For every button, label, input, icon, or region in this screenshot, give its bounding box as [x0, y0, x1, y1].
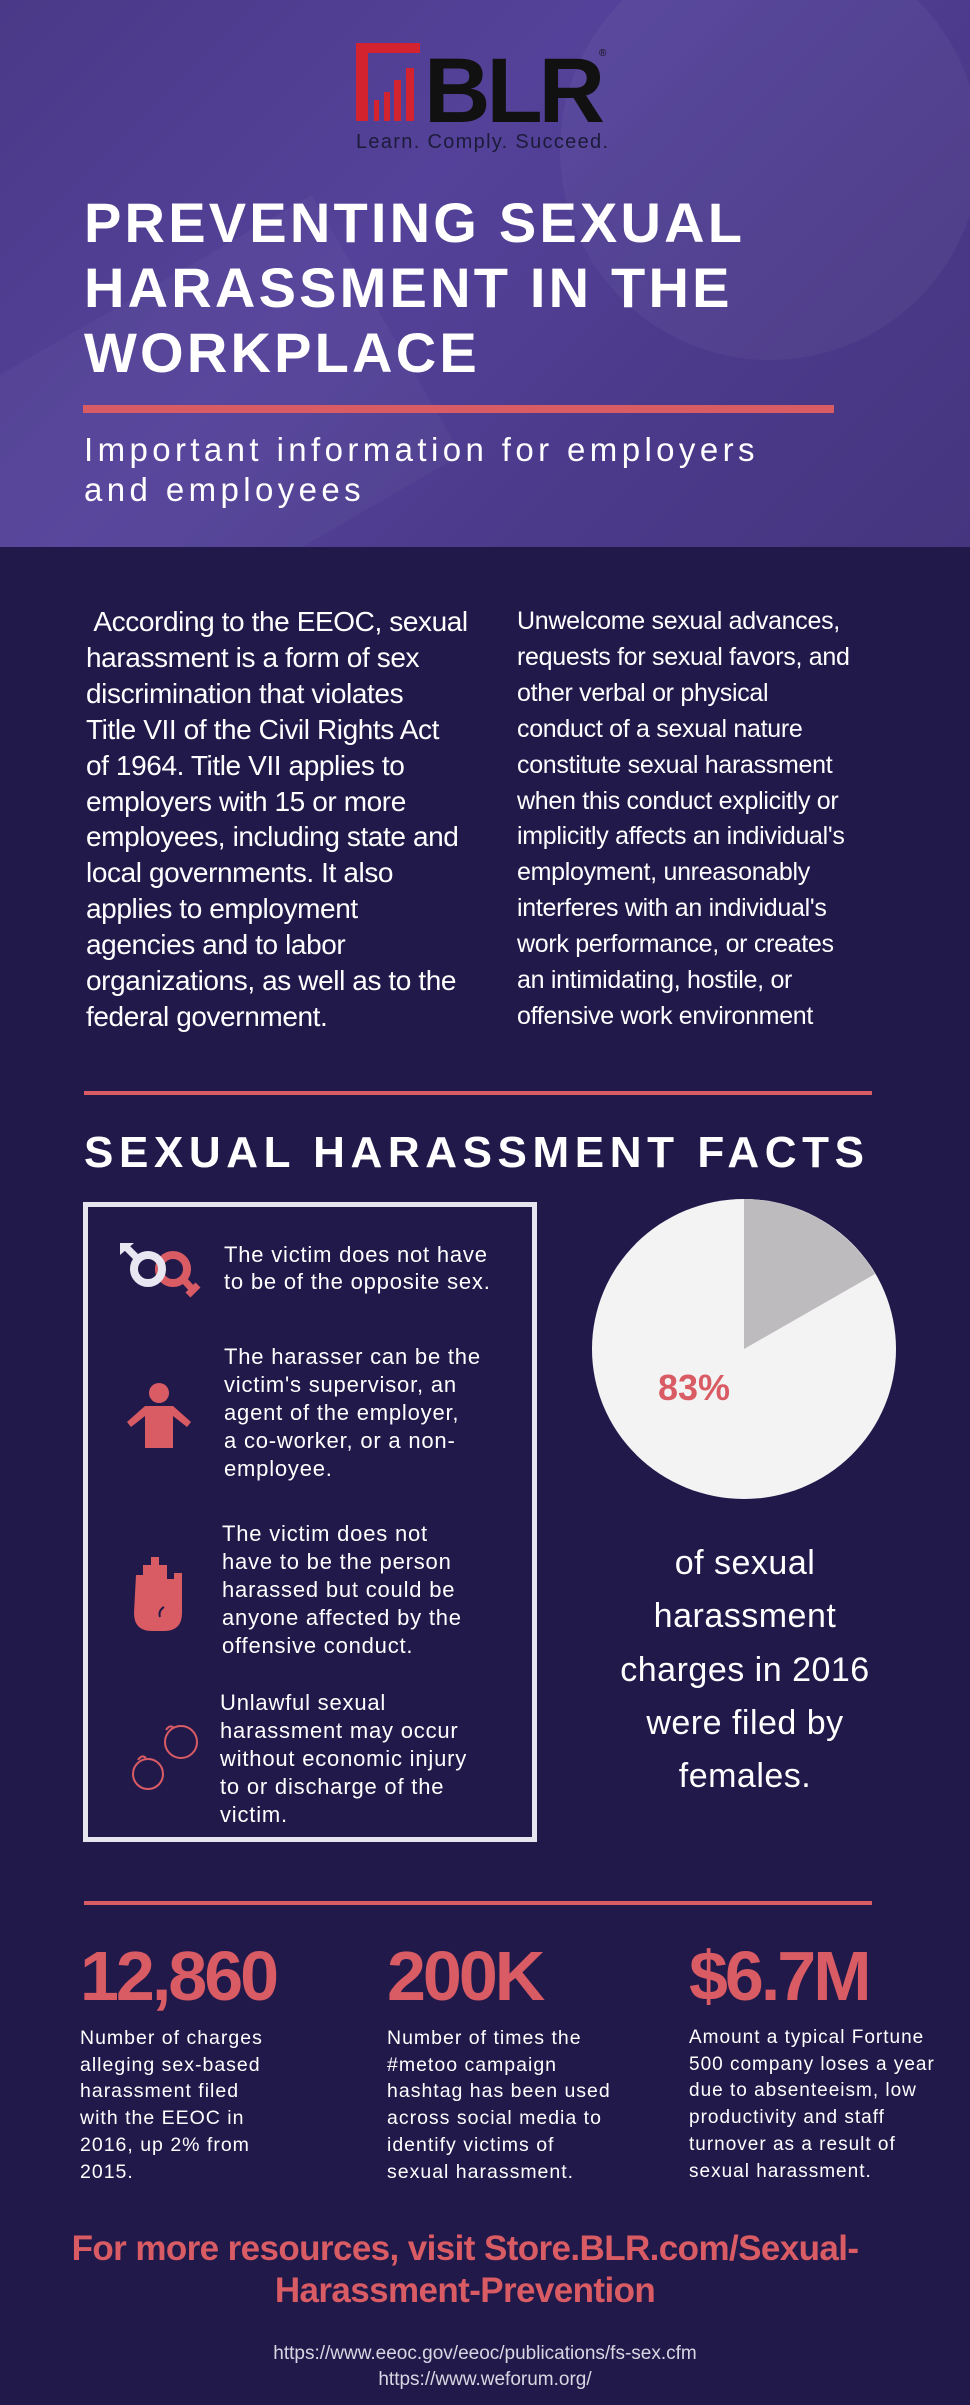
- text block: what constitutes harassment: constitute sexual harassment: [517, 751, 832, 779]
- text block: what constitutes harassment: an intimidating, hostile, or: [517, 966, 792, 994]
- text: harasser: agent of the employer,: [224, 1400, 459, 1425]
- stat: $6.7M: due to absenteeism, low: [689, 2080, 917, 2101]
- stat: 12,860: [80, 1937, 276, 2183]
- sources: https://www.eeoc.gov/eeoc/publications/fs-sex.cfm: [273, 2343, 697, 2364]
- logo: Learn. Comply. Succeed.: [356, 131, 608, 153]
- text block: EEOC definition: employees, including state and: [86, 821, 458, 852]
- call to action: Harassment-Prevention: [275, 2271, 655, 2310]
- text: unlawful without injury: Unlawful sexual: [220, 1690, 386, 1715]
- icon: handcuffs: [132, 1725, 198, 1790]
- text: unlawful without injury: to or discharge of the: [220, 1774, 444, 1799]
- subtitle: and employees: [84, 471, 365, 508]
- heading: facts: SEXUAL HARASSMENT FACTS: [84, 1128, 870, 1177]
- text block: EEOC definition: agencies and to labor: [86, 929, 345, 960]
- icon: gender symbols: [120, 1243, 200, 1298]
- subtitle: Important information for employers: [84, 431, 759, 468]
- title underline: [83, 405, 834, 413]
- title: [84, 191, 745, 384]
- title: WORKPLACE: [84, 321, 480, 384]
- text block: what constitutes harassment: when this conduct explicitly or: [517, 787, 838, 815]
- text block: what constitutes harassment: Unwelcome sexual advances,: [517, 607, 840, 635]
- text: opposite sex: The victim does not have: [224, 1242, 488, 1267]
- stat: $6.7M: $6.7M: [689, 1937, 869, 2015]
- call to action: For more resources, visit Store.BLR.com/Sexual-: [72, 2229, 858, 2268]
- text block: EEOC definition: According to the EEOC, sexual: [93, 606, 468, 637]
- text block: what constitutes harassment: interferes with an individual's: [517, 894, 827, 922]
- text block: what constitutes harassment: employment, unreasonably: [517, 858, 810, 886]
- stat: $6.7M: [689, 1937, 935, 2182]
- text block: EEOC definition: federal government.: [86, 1001, 327, 1032]
- sources: [273, 2343, 697, 2390]
- text block: EEOC definition: Title VII of the Civil Rights Act: [86, 714, 439, 745]
- text: harasser: victim's supervisor, an: [224, 1372, 457, 1397]
- text block: EEOC definition: harassment is a form of sex: [86, 642, 419, 673]
- stat: 12,860: Number of charges: [80, 2027, 263, 2049]
- text block: what constitutes harassment: [517, 607, 850, 1030]
- stat: 200K: [387, 1937, 611, 2183]
- title: HARASSMENT IN THE: [84, 256, 733, 319]
- text block: EEOC definition: employers with 15 or more: [86, 786, 406, 817]
- text: victim not person harassed: offensive conduct.: [222, 1633, 413, 1658]
- logo: BLR: [424, 42, 604, 142]
- stat: 200K: sexual harassment.: [387, 2161, 574, 2183]
- stat: 12,860: harassment filed: [80, 2080, 239, 2102]
- icon: BLR bars: [356, 43, 420, 121]
- stat: 12,860: with the EEOC in: [80, 2107, 244, 2129]
- pie chart: 83%: 83%: [658, 1367, 730, 1408]
- icon: person: [127, 1383, 191, 1448]
- text: unlawful without injury: [220, 1690, 467, 1827]
- logo: ®: [599, 48, 607, 59]
- title: PREVENTING SEXUAL: [84, 191, 745, 254]
- stat: 12,860: alleging sex-based: [80, 2054, 261, 2076]
- stat: 200K: #metoo campaign: [387, 2054, 557, 2076]
- stat: $6.7M: Amount a typical Fortune: [689, 2027, 924, 2048]
- stat: 200K: Number of times the: [387, 2027, 582, 2049]
- stat: 200K: identify victims of: [387, 2134, 554, 2156]
- text block: what constitutes harassment: conduct of a sexual nature: [517, 715, 802, 743]
- stat: 200K: hashtag has been used: [387, 2080, 611, 2102]
- stat: $6.7M: 500 company loses a year: [689, 2054, 935, 2075]
- text block: what constitutes harassment: work performance, or creates: [517, 930, 834, 958]
- text: harasser: The harasser can be the: [224, 1344, 481, 1369]
- stat: 200K: 200K: [387, 1937, 542, 2015]
- icon: hand: [134, 1557, 182, 1631]
- text: harasser: [224, 1344, 481, 1481]
- call to action: [72, 2229, 858, 2310]
- text: opposite sex: [224, 1242, 491, 1294]
- panel: facts box: [83, 1202, 537, 1842]
- text block: what constitutes harassment: requests for sexual favors, and: [517, 643, 850, 671]
- text: victim not person harassed: anyone affected by the: [222, 1605, 462, 1630]
- stat: $6.7M: turnover as a result of: [689, 2134, 896, 2155]
- stat: 200K: across social media to: [387, 2107, 602, 2129]
- pie caption: were filed by: [646, 1704, 844, 1742]
- pie caption: females.: [679, 1757, 811, 1795]
- text: victim not person harassed: have to be the person: [222, 1549, 452, 1574]
- pie caption: of sexual: [675, 1544, 815, 1582]
- sources: https://www.weforum.org/: [378, 2369, 592, 2390]
- text block: EEOC definition: applies to employment: [86, 893, 358, 924]
- stat: $6.7M: productivity and staff: [689, 2107, 885, 2128]
- text: harasser: employee.: [224, 1456, 333, 1481]
- text block: EEOC definition: discrimination that violates: [86, 678, 403, 709]
- stat: 12,860: 2016, up 2% from: [80, 2134, 250, 2156]
- pie caption: charges in 2016: [620, 1651, 870, 1689]
- text: unlawful without injury: victim.: [220, 1802, 288, 1827]
- pie caption: harassment: [654, 1597, 836, 1635]
- stat: $6.7M: sexual harassment.: [689, 2161, 872, 2182]
- stat: 12,860: 12,860: [80, 1937, 276, 2015]
- text block: EEOC definition: of 1964. Title VII applies to: [86, 750, 404, 781]
- text: victim not person harassed: [222, 1521, 462, 1658]
- stat: 12,860: 2015.: [80, 2161, 134, 2183]
- pie caption: [620, 1544, 870, 1795]
- logo: [356, 42, 608, 153]
- text block: what constitutes harassment: implicitly affects an individual's: [517, 822, 845, 850]
- text: harasser: a co-worker, or a non-: [224, 1428, 456, 1453]
- text: unlawful without injury: without economic injury: [220, 1746, 467, 1771]
- header background: [0, 0, 970, 547]
- pie chart: 83%: [592, 1199, 896, 1499]
- text: opposite sex: to be of the opposite sex.: [224, 1269, 491, 1294]
- text: victim not person harassed: The victim does not: [222, 1521, 428, 1546]
- text block: EEOC definition: local governments. It also: [86, 857, 393, 888]
- text: unlawful without injury: harassment may occur: [220, 1718, 459, 1743]
- text block: EEOC definition: [86, 606, 468, 1032]
- text: victim not person harassed: harassed but could be: [222, 1577, 455, 1602]
- text block: EEOC definition: organizations, as well as to the: [86, 965, 456, 996]
- subtitle: [84, 431, 759, 508]
- text block: what constitutes harassment: offensive work environment: [517, 1002, 813, 1030]
- text block: what constitutes harassment: other verbal or physical: [517, 679, 768, 707]
